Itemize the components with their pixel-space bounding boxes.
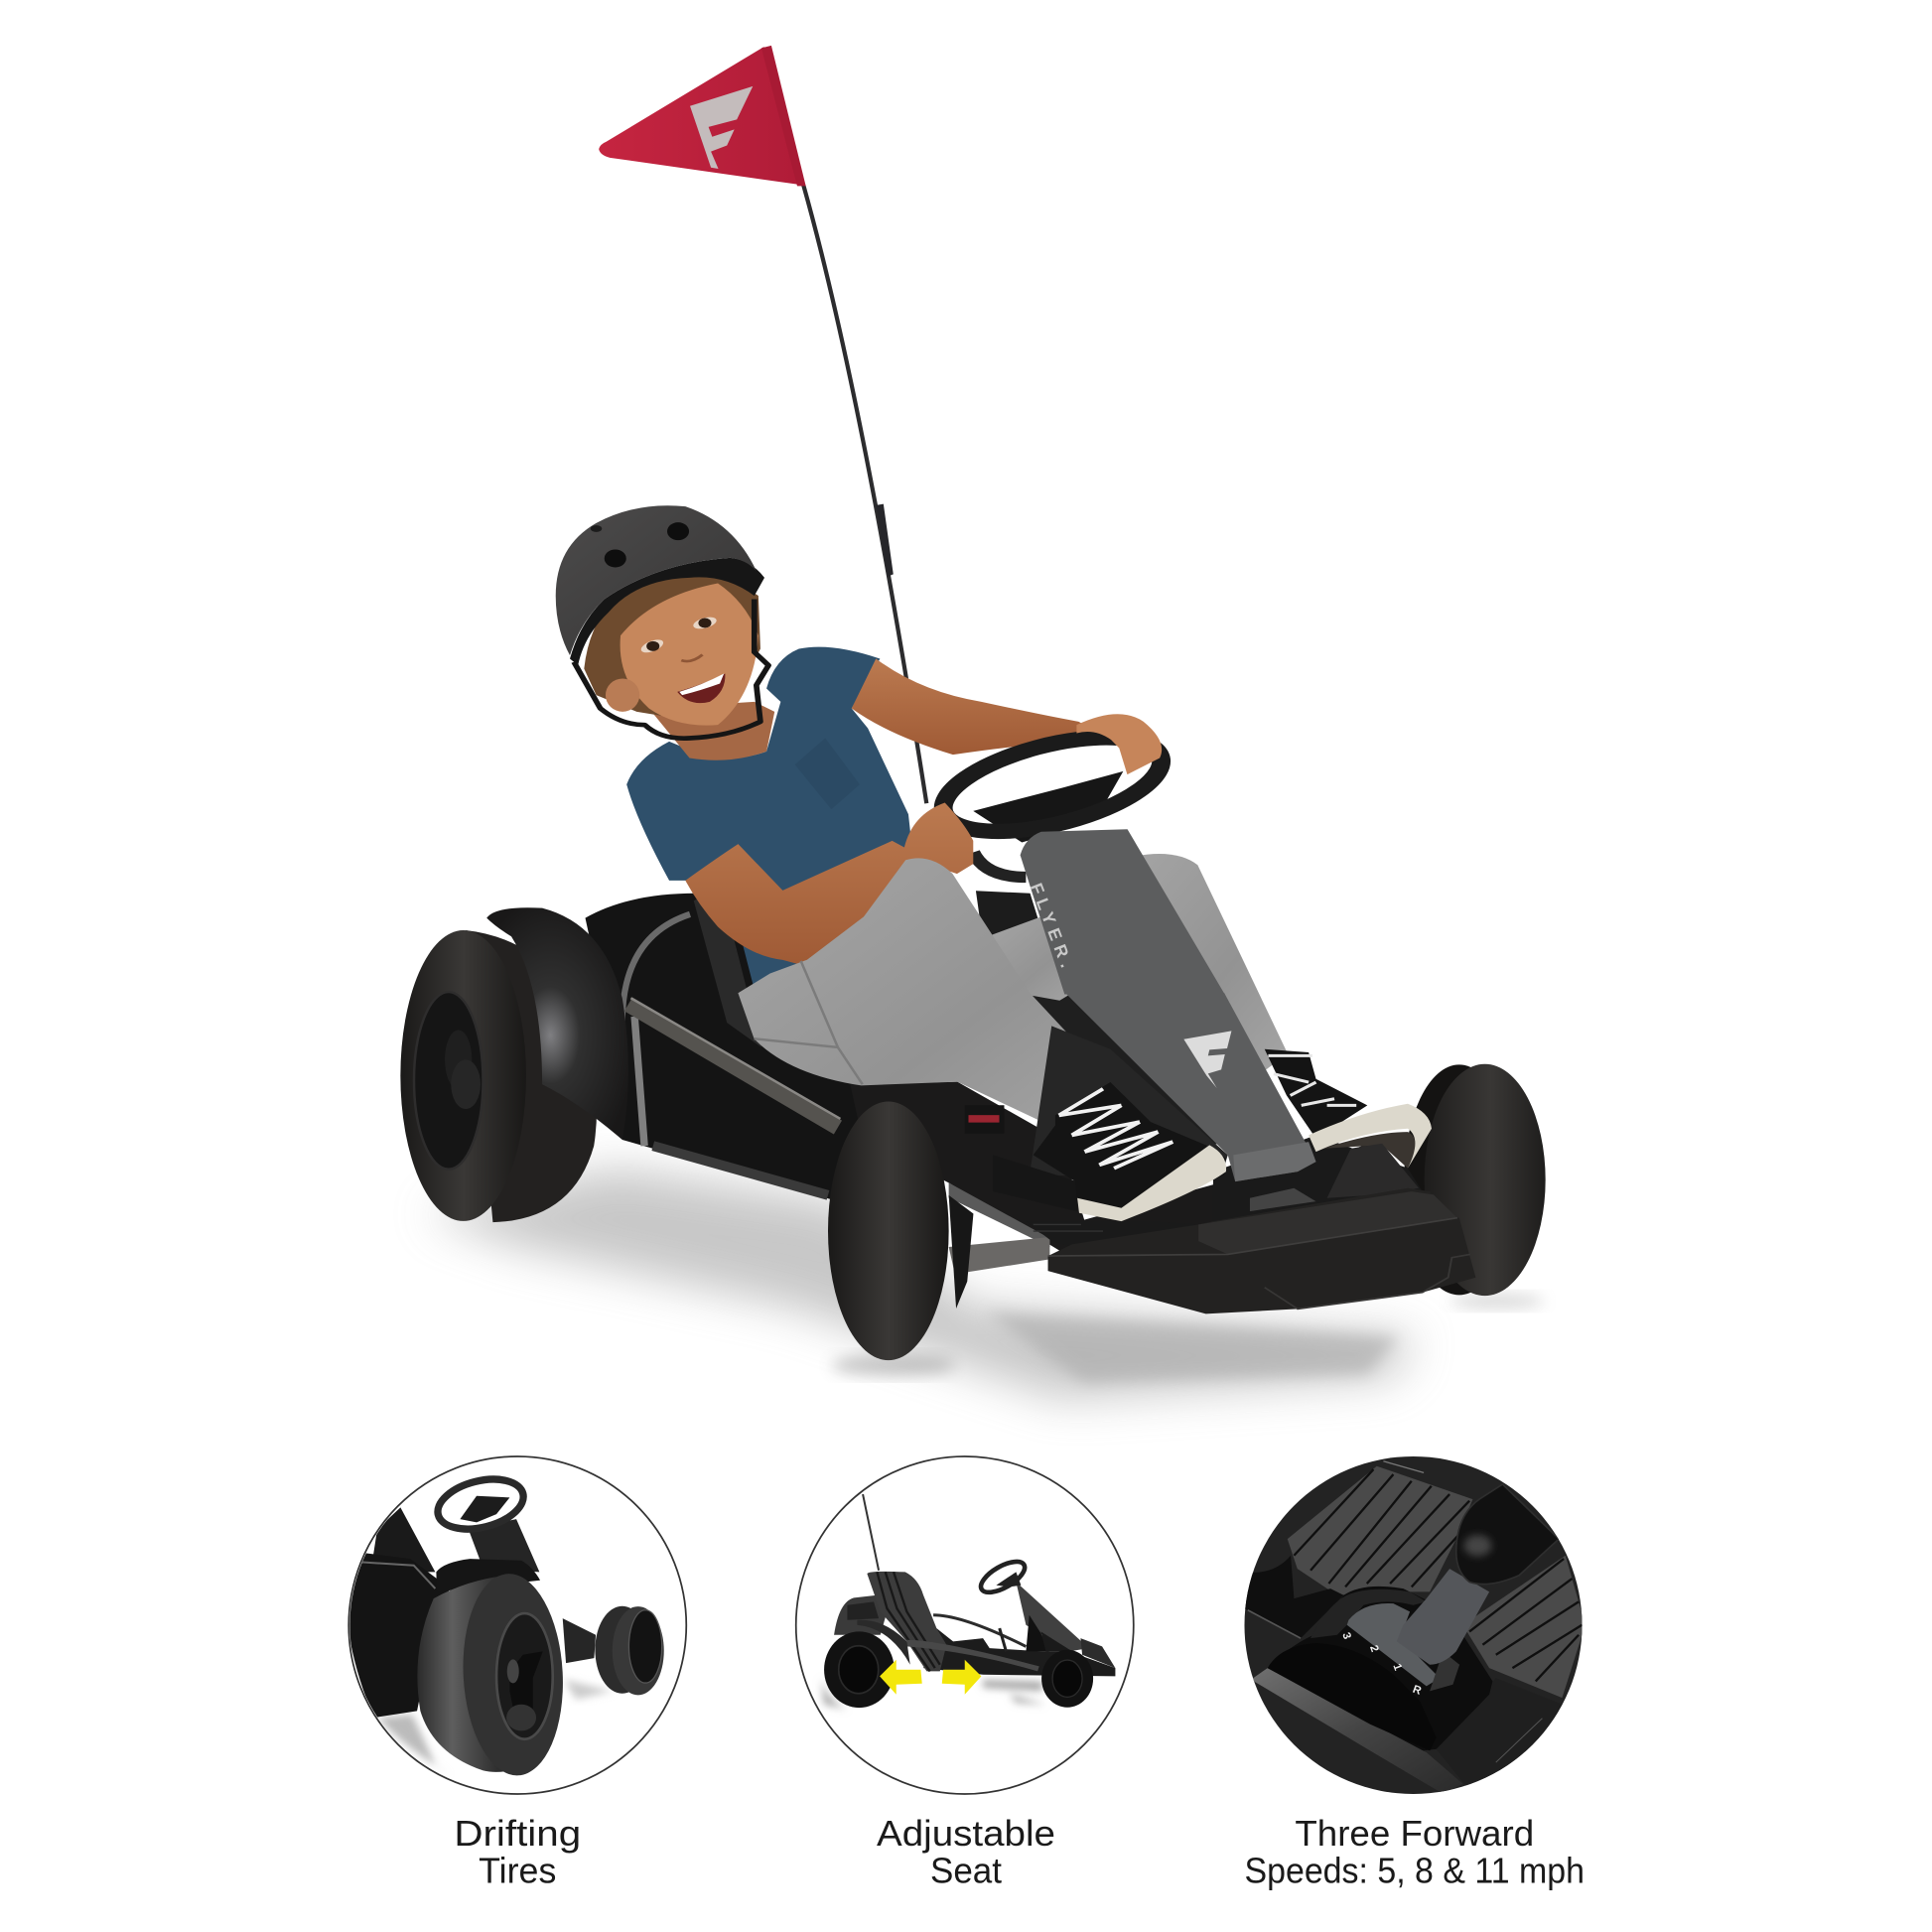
ground shadows [821, 1678, 1045, 1710]
yellow right arrow [942, 1660, 981, 1695]
far arm [852, 658, 1111, 755]
lower right ribbed floor [1462, 1556, 1586, 1698]
ground shadow [425, 1169, 1544, 1399]
bumper [1048, 1188, 1475, 1313]
steering column cover lower portion [1065, 993, 1316, 1181]
caption: adjustable seat: Seat [930, 1850, 1002, 1890]
left post [1244, 1556, 1343, 1638]
steering column cover upper portion [1021, 829, 1225, 995]
caption: three forward speeds: Speeds: 5, 8 & 11 mph [1244, 1850, 1585, 1890]
shifter knob [1456, 1484, 1559, 1585]
chassis body and side frame [586, 888, 888, 1201]
far hand [1076, 714, 1162, 774]
far shoe [1265, 1049, 1432, 1169]
console [1268, 1587, 1492, 1750]
steering wheel [979, 1559, 1027, 1594]
caption: adjustable seat: Adjustable [877, 1813, 1055, 1854]
column F logo [1183, 1031, 1231, 1088]
child upper body [556, 505, 1175, 990]
upper frame [370, 1507, 435, 1572]
dark backing under column [1030, 1026, 1423, 1224]
steering wheel [929, 719, 1175, 878]
shifter shaft [1397, 1569, 1489, 1665]
upper ribbed floor [1288, 1466, 1472, 1595]
neck [649, 702, 774, 760]
flag F logo [690, 86, 753, 169]
seat [867, 1572, 946, 1671]
rear hub [496, 1613, 553, 1739]
near arm and hand [685, 803, 973, 967]
rear wheel [824, 1631, 895, 1708]
feature: adjustable seat [796, 1456, 1134, 1794]
rear fender [486, 907, 628, 1140]
foot step [993, 1155, 1316, 1246]
near shoe [1034, 1082, 1226, 1221]
rear hub [414, 992, 483, 1170]
small far wheel [563, 1618, 596, 1663]
top bar highlight [1383, 1461, 1424, 1472]
t-shirt [626, 647, 912, 990]
gear labels: 3 [1339, 1631, 1353, 1641]
rear mass [834, 1595, 887, 1635]
red pennant flag [599, 46, 806, 186]
pedal post [1327, 1144, 1419, 1198]
yellow left arrow [880, 1660, 922, 1695]
hoop tube [933, 1615, 1026, 1646]
large rear wheel tread [417, 1577, 504, 1772]
steering wheel [434, 1475, 527, 1533]
front wheel [1041, 1650, 1093, 1708]
feature: three forward speeds shifter: R [1411, 1684, 1423, 1698]
feature: three forward speeds shifter: 2 [1367, 1644, 1380, 1654]
feature: three forward speeds shifter: 1 [1390, 1662, 1404, 1672]
front floor and seatbelt clip [850, 1082, 1448, 1274]
steering column [469, 1519, 539, 1572]
antenna [863, 1494, 879, 1571]
gear slot [1347, 1603, 1440, 1686]
infographic canvas [347, 46, 1583, 1890]
face [606, 583, 759, 726]
lower dark panel [1465, 1705, 1563, 1785]
caption: three forward speeds: Three Forward [1295, 1813, 1534, 1854]
caption: three forward speeds [1244, 1813, 1585, 1890]
front right wheel [1404, 1064, 1546, 1296]
rear fender [857, 1620, 910, 1665]
console hump [1268, 1643, 1437, 1750]
caption: drifting tires: Drifting [454, 1813, 581, 1854]
flag pole [803, 185, 926, 803]
grey band [1251, 1668, 1462, 1794]
near leg [738, 858, 1115, 1140]
seat back [694, 888, 761, 1047]
cockpit, far leg and far seat [976, 854, 1288, 1146]
caption: adjustable seat [877, 1813, 1055, 1890]
side tube [906, 1640, 1039, 1671]
helmet [556, 505, 764, 665]
rear left wheel [400, 930, 597, 1222]
body floor [923, 1628, 1115, 1676]
feature: drifting tires [347, 1456, 686, 1794]
helmet straps [574, 599, 768, 739]
feature: three forward speeds shifter [1244, 1456, 1586, 1794]
fender [436, 1559, 540, 1591]
FLYER wordmark: FLYER. [1027, 881, 1076, 970]
front left wheel [828, 1102, 973, 1360]
caption: drifting tires [454, 1813, 581, 1890]
chassis side [347, 1552, 450, 1718]
front section: right wheel, shoes, column, bumper [993, 993, 1546, 1313]
ground shadow [377, 1712, 438, 1767]
caption: drifting tires: Tires [479, 1850, 556, 1890]
hair behind face [584, 572, 760, 725]
column [1017, 1585, 1082, 1651]
